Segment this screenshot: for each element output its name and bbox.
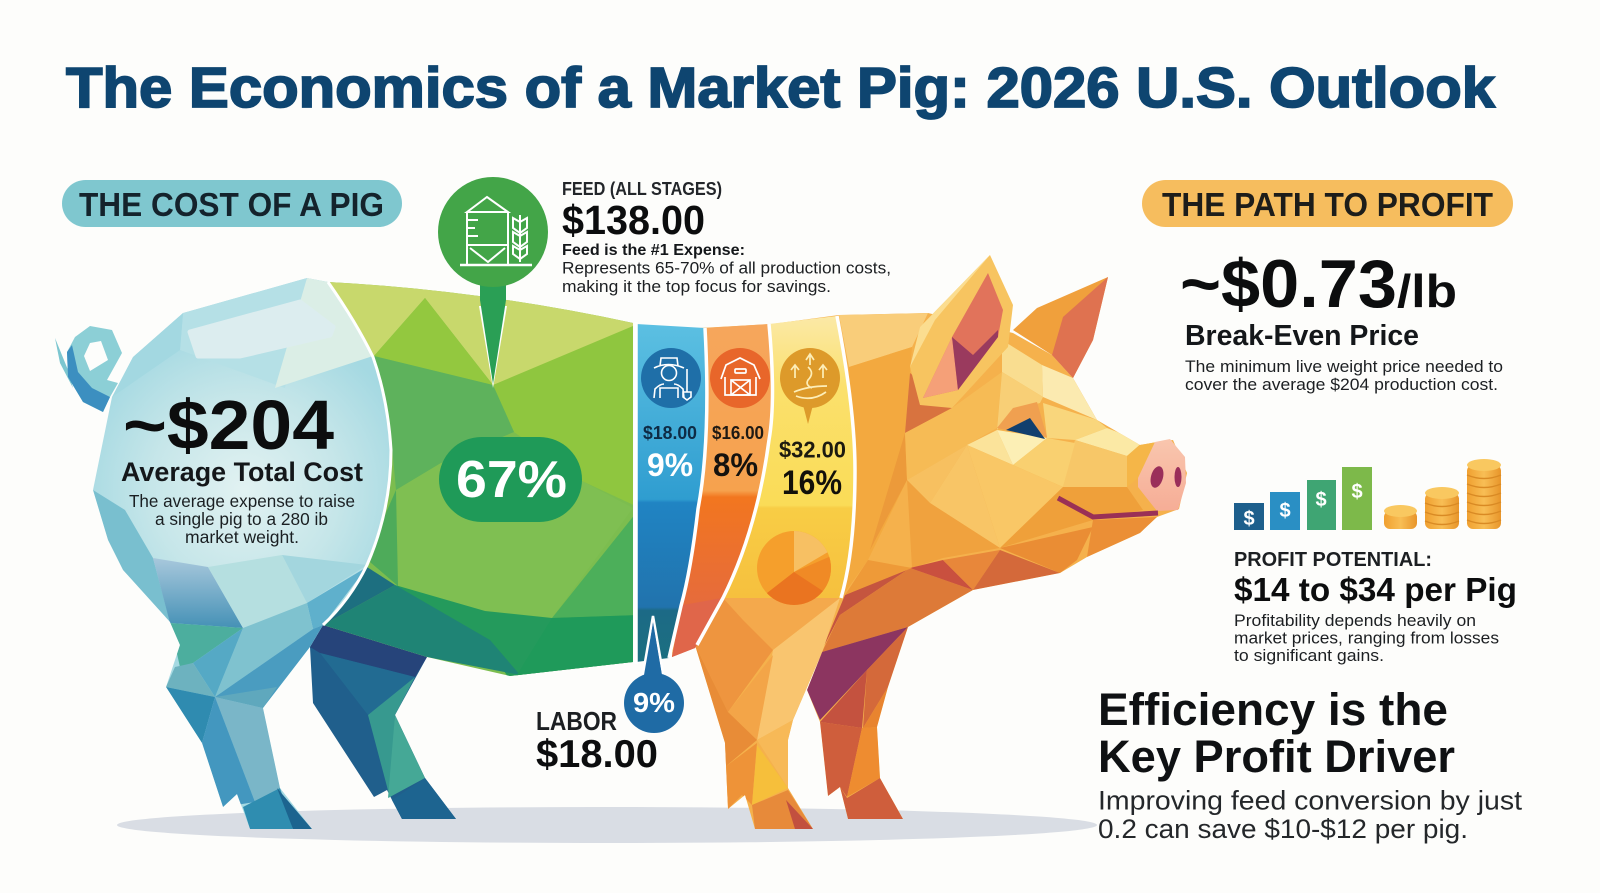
label: labor band	[643, 423, 697, 483]
pig front body and head	[660, 300, 1200, 840]
icon: hand and growth	[780, 348, 840, 424]
callout: profit potential: Profitability depends heavily on	[1234, 611, 1476, 630]
callout: break-even price: /lb	[1397, 265, 1457, 317]
label: labor band: 9%	[647, 447, 693, 483]
label: other costs band: $32.00	[779, 436, 846, 462]
callout: labor: $18.00	[536, 733, 658, 776]
callout: average total cost: a single pig to a 280 ib	[155, 509, 328, 529]
pin: labor 9%: 9%	[633, 687, 675, 718]
callout: feed text: making it the top focus for savings.	[562, 278, 831, 296]
callout: break-even price: Break-Even Price	[1185, 320, 1419, 352]
ground shadow	[117, 807, 1097, 843]
callout: average total cost: The average expense to raise	[129, 491, 355, 511]
callout: break-even price: ~$0.73	[1180, 246, 1397, 322]
callout: labor	[536, 706, 658, 776]
callout: efficiency: Efficiency is the	[1098, 684, 1448, 735]
callout: profit potential	[1234, 549, 1517, 665]
segment: other costs band	[723, 316, 855, 598]
icon: barn	[710, 348, 770, 408]
callout: profit potential: $14 to $34 per Pig	[1234, 571, 1517, 608]
pig ears	[910, 255, 1108, 408]
callout: labor: LABOR	[536, 706, 617, 736]
pin: feed with silo icon	[438, 177, 548, 388]
icon: dollar bars: $	[1315, 489, 1327, 511]
callout: feed text: $138.00	[562, 197, 705, 243]
segment: feed (green body)	[320, 270, 640, 680]
callout: efficiency: Key Profit Driver	[1098, 731, 1455, 782]
badge: 67%	[439, 437, 582, 522]
segment: housing band	[672, 324, 772, 657]
label: other costs band	[779, 436, 846, 502]
callout: break-even price: The minimum live weight price needed to	[1185, 357, 1503, 376]
callout: average total cost: market weight.	[185, 527, 299, 547]
pin: labor 9%	[624, 616, 684, 733]
badge: 67%: 67%	[456, 451, 567, 509]
pig tail	[55, 326, 122, 412]
band separators	[636, 316, 855, 664]
segment: average total cost (blue rump)	[93, 278, 390, 829]
callout: efficiency: Improving feed conversion by just	[1098, 786, 1523, 816]
callout: average total cost	[121, 386, 363, 547]
rump divider arc	[323, 282, 391, 625]
callout: feed text	[562, 179, 891, 296]
segment: labor band	[636, 324, 707, 662]
pill heading: the cost of a pig: THE COST OF A PIG	[79, 186, 384, 223]
callout: efficiency: 0.2 can save $10-$12 per pig.	[1098, 814, 1468, 844]
callout: profit potential: market prices, ranging from losses	[1234, 628, 1499, 648]
icon: dollar bars	[1234, 467, 1372, 530]
pill heading: the path to profit: THE PATH TO PROFIT	[1162, 186, 1493, 223]
icon: farmer	[641, 348, 701, 408]
callout: average total cost: Average Total Cost	[121, 457, 363, 487]
pie chart icon	[757, 531, 831, 605]
callout: feed text: Feed is the #1 Expense:	[562, 242, 745, 259]
icon: dollar bars: $	[1243, 508, 1255, 530]
label: other costs band: 16%	[782, 464, 842, 502]
title: The Economics of a Market Pig: 2026 U.S. Outlook	[66, 56, 1495, 120]
callout: efficiency	[1098, 684, 1523, 844]
pig illustration	[55, 255, 1200, 850]
label: housing band: 8%	[713, 447, 758, 483]
icon: dollar bars: $	[1351, 481, 1363, 503]
icon: coin stacks	[1384, 459, 1501, 529]
callout: break-even price	[1180, 246, 1503, 394]
pig face: eye, snout, mouth	[997, 402, 1186, 517]
callout: average total cost: ~$204	[123, 386, 334, 464]
label: housing band: $16.00	[712, 423, 764, 443]
callout: feed text: Represents 65-70% of all production costs,	[562, 260, 891, 278]
label: housing band	[712, 423, 764, 483]
callout: profit potential: to significant gains.	[1234, 646, 1384, 665]
hind far leg	[310, 625, 456, 819]
label: labor band: $18.00	[643, 423, 697, 443]
callout: profit potential: PROFIT POTENTIAL:	[1234, 549, 1432, 571]
icon: dollar bars: $	[1279, 500, 1291, 522]
callout: break-even price: cover the average $204 production cost.	[1185, 375, 1498, 394]
callout: feed text: FEED (ALL STAGES)	[562, 179, 722, 199]
